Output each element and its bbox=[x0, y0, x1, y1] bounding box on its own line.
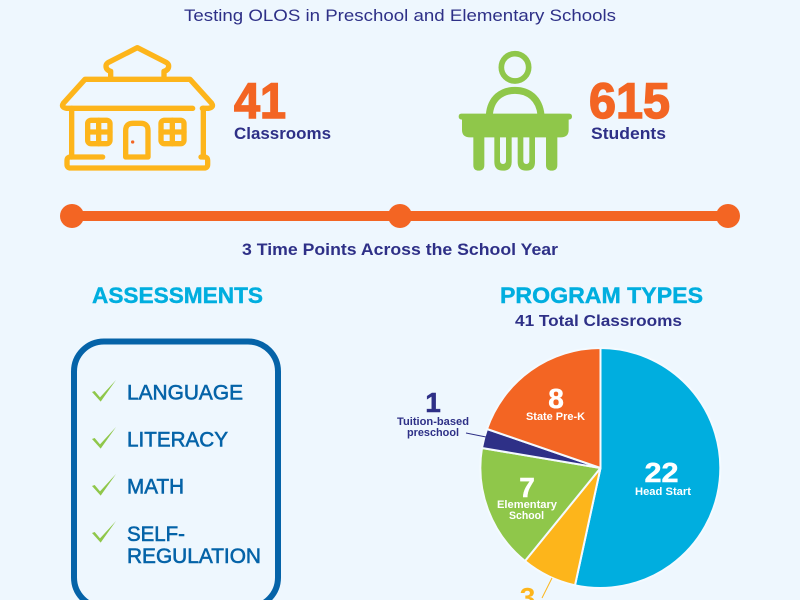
subheading: total classrooms: 41 Total Classrooms bbox=[515, 313, 682, 330]
icon: school house bbox=[63, 48, 212, 168]
label: 3 with leader line bbox=[520, 578, 552, 600]
label: head start: 22 bbox=[644, 457, 678, 488]
item: self-regulation: REGULATION bbox=[127, 544, 261, 568]
label: elementary school: Elementary bbox=[497, 499, 558, 511]
timeline with three time points bbox=[60, 204, 740, 228]
label: classrooms: Classrooms bbox=[234, 124, 331, 143]
heading: program types: PROGRAM TYPES bbox=[500, 283, 703, 308]
heading: assessments: ASSESSMENTS bbox=[92, 283, 263, 308]
label: tuition-based preschool: Tuition-based bbox=[397, 416, 469, 428]
label: elementary school: School bbox=[509, 510, 544, 522]
item: math: MATH bbox=[127, 474, 184, 498]
check: language bbox=[92, 380, 116, 402]
label: elementary school bbox=[497, 472, 558, 522]
slice: head start bbox=[575, 348, 720, 588]
stat: classrooms bbox=[234, 73, 331, 143]
stat: students bbox=[589, 73, 670, 143]
slice: elementary school bbox=[480, 448, 600, 561]
check: literacy bbox=[92, 427, 116, 449]
slice: state pre-k bbox=[487, 348, 600, 468]
label: students: Students bbox=[591, 124, 666, 143]
panel: assessments list bbox=[74, 342, 278, 600]
check: self-regulation bbox=[92, 521, 116, 543]
slice: tuition-based preschool bbox=[482, 429, 600, 468]
check: math bbox=[92, 474, 116, 496]
item: language: LANGUAGE bbox=[127, 380, 243, 404]
label: state pre-k: 8 bbox=[548, 383, 564, 414]
timeline caption: 3 Time Points Across the School Year bbox=[242, 240, 558, 259]
item: self-regulation: SELF- bbox=[127, 522, 185, 546]
label: state pre-k: State Pre-K bbox=[526, 411, 585, 423]
slice: unnamed 3 bbox=[525, 468, 600, 585]
label: tuition-based preschool: 1 bbox=[425, 387, 441, 418]
item: literacy: LITERACY bbox=[127, 428, 228, 452]
label: tuition-based preschool: preschool bbox=[407, 427, 459, 439]
label: head start: Head Start bbox=[635, 486, 691, 498]
label: tuition-based preschool bbox=[397, 387, 486, 439]
pie chart: program types bbox=[480, 348, 720, 588]
number: 41: 41 bbox=[234, 73, 286, 129]
number: 615: 615 bbox=[589, 73, 670, 129]
label: head start bbox=[635, 457, 691, 498]
title: Testing OLOS in Preschool and Elementary Schools bbox=[184, 6, 616, 25]
label: state pre-k bbox=[526, 383, 585, 423]
label: elementary school: 7 bbox=[519, 472, 535, 503]
icon: student at desk bbox=[459, 54, 572, 171]
